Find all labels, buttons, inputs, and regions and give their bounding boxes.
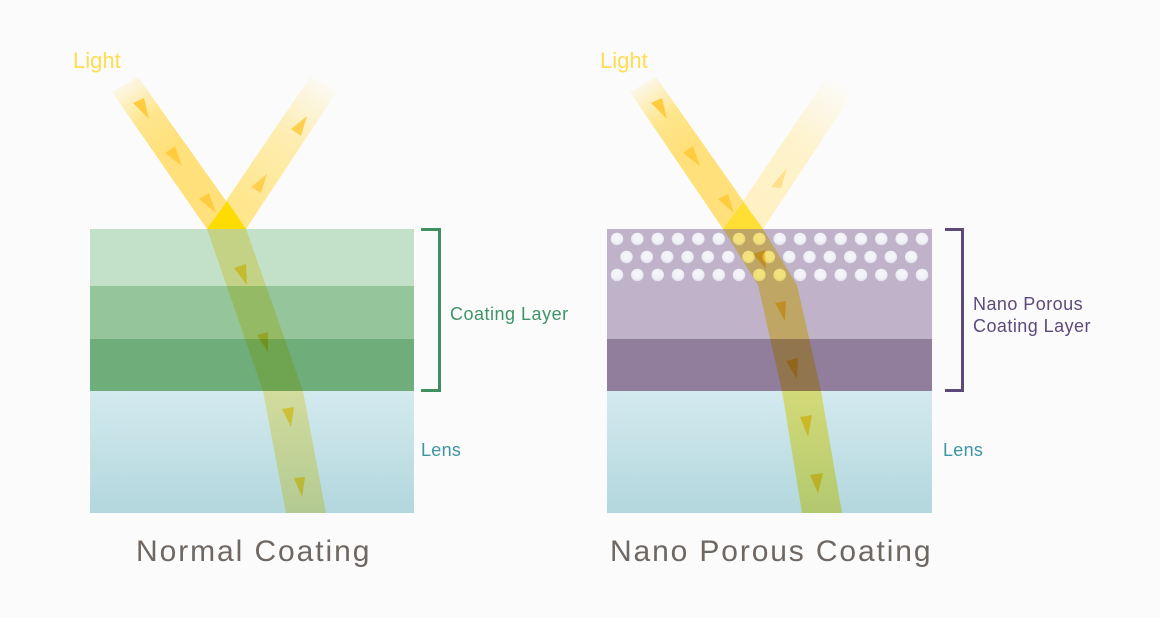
reflected light beam: [724, 77, 855, 229]
bracket: nano porous coating layer: [945, 230, 962, 390]
coating layer 1: [90, 229, 414, 286]
label: nano porous coating layer: Nano Porous: [973, 294, 1083, 314]
lens block: [607, 391, 932, 513]
label: light: Light: [73, 48, 121, 73]
heading: normal coating: Normal Coating: [136, 535, 371, 568]
coating layer lower: [607, 339, 932, 391]
incoming arrows: [651, 98, 734, 213]
refracted arrows: [753, 250, 823, 493]
beam overlap: [723, 202, 763, 229]
bracket: coating layer: [421, 230, 440, 390]
lens block: [90, 391, 414, 513]
nano pores: [611, 233, 928, 281]
reflected light beam: [207, 77, 338, 229]
incoming light beam: [112, 77, 246, 229]
coating layer upper: [607, 229, 932, 339]
label: light: Light: [600, 48, 648, 73]
label: lens: Lens: [421, 440, 461, 460]
reflected arrows: [251, 116, 307, 193]
refracted beam: [723, 229, 842, 513]
incoming arrows: [133, 98, 216, 213]
label: nano porous coating layer: Coating Layer: [973, 316, 1091, 336]
heading: nano porous coating: Nano Porous Coating: [610, 535, 932, 568]
reflected arrow: [771, 168, 787, 188]
label: lens: Lens: [943, 440, 983, 460]
refracted arrows: [234, 264, 305, 497]
incoming light beam: [630, 77, 763, 229]
coating layer 2: [90, 286, 414, 339]
coating layer 3: [90, 339, 414, 391]
panel: nano porous coating: [600, 48, 1091, 568]
refracted beam: [207, 229, 326, 513]
beam overlap: [207, 201, 246, 229]
panel: normal coating: [73, 48, 569, 568]
label: coating layer: Coating Layer: [450, 304, 569, 324]
